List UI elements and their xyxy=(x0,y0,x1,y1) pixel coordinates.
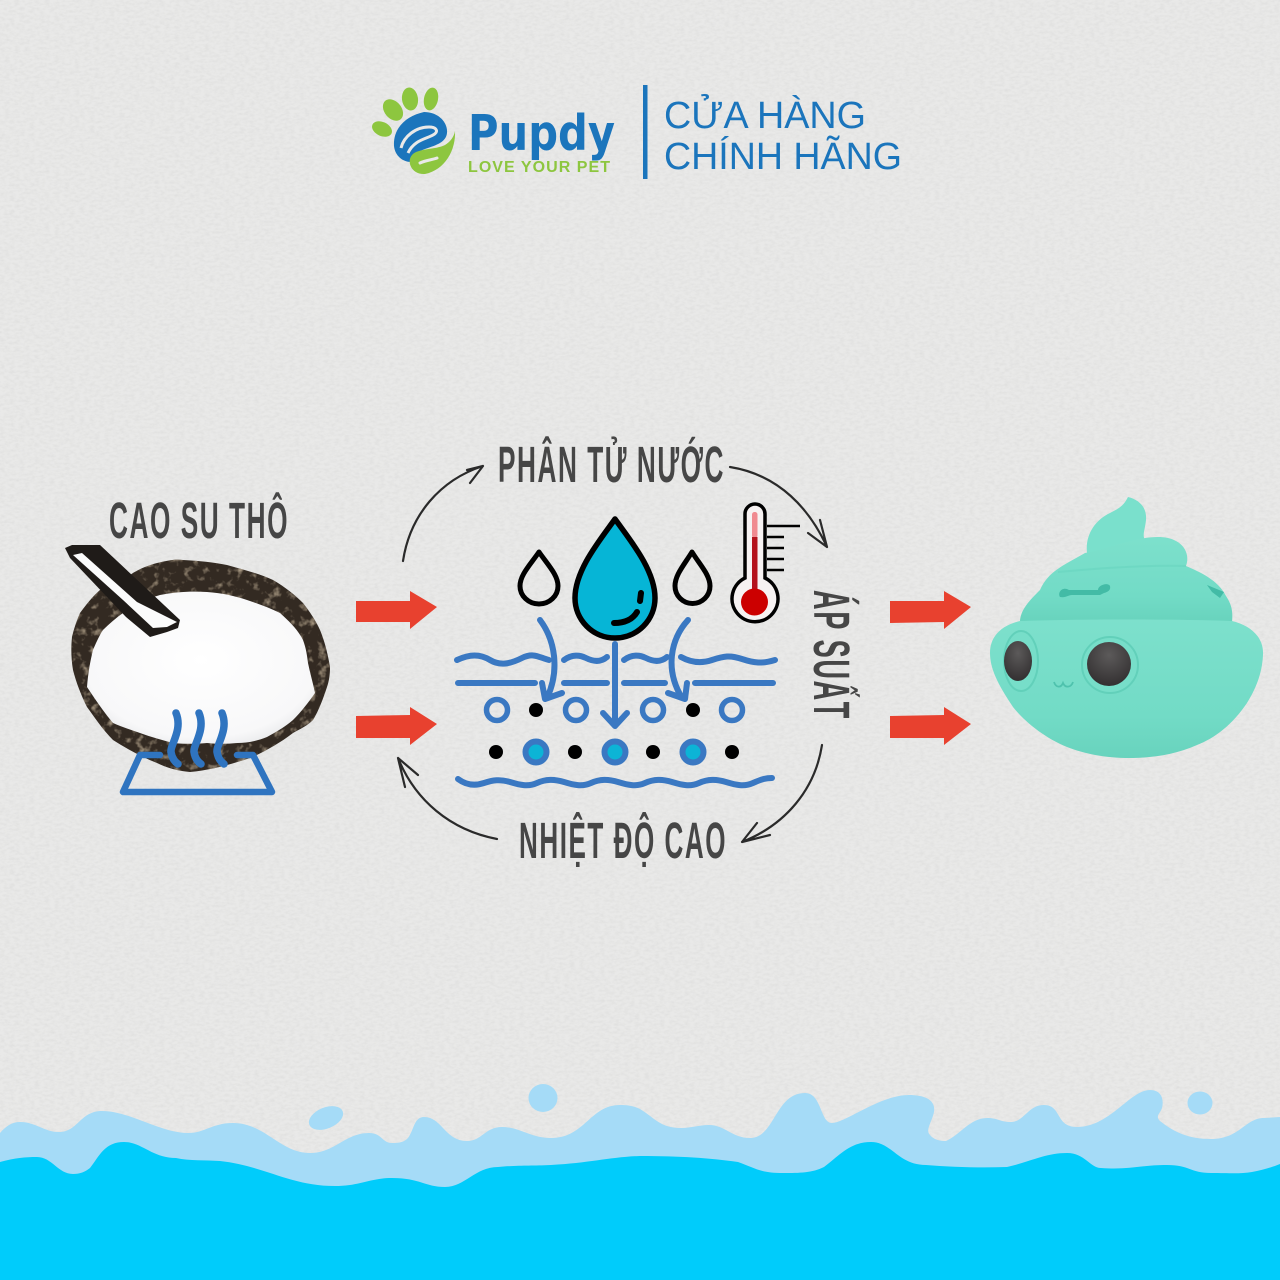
heading: official store: CHÍNH HÃNG xyxy=(664,135,902,178)
divider xyxy=(643,85,648,179)
toy tail xyxy=(1087,497,1146,553)
label: pressure: ÁP SUẤT xyxy=(803,590,861,720)
wooden spout xyxy=(65,545,180,637)
icon: small water drop left xyxy=(520,552,558,604)
steam xyxy=(171,713,224,764)
latex xyxy=(87,592,315,744)
toy lower body xyxy=(990,620,1263,758)
arrow: red output 2 xyxy=(890,707,971,745)
label: high temperature: NHIỆT ĐỘ CAO xyxy=(519,811,727,869)
toy side mark xyxy=(1207,585,1224,598)
water decoration xyxy=(0,1084,1280,1280)
cycle arrows xyxy=(398,466,827,842)
membrane waves xyxy=(457,655,775,785)
icon: large water drop xyxy=(575,519,655,638)
toy upper tier xyxy=(1020,537,1232,622)
icon: thermometer xyxy=(732,504,800,622)
arrows through membrane xyxy=(540,620,688,726)
deep wave xyxy=(0,1142,1280,1280)
heading: official store: CỬA HÀNG xyxy=(664,93,866,137)
toy bone mark xyxy=(1059,584,1110,597)
toy right eye xyxy=(1082,637,1138,693)
toy left eye xyxy=(1004,631,1038,691)
illustration: bowl of latex on burner xyxy=(65,545,330,792)
icon: paw and swirl xyxy=(370,86,455,174)
particles row 2 xyxy=(489,742,739,762)
arrow: red output 1 xyxy=(890,591,971,629)
diagram: water passing through membrane xyxy=(457,504,800,785)
droplets xyxy=(305,1084,1212,1134)
burner xyxy=(123,755,272,792)
product: teal poop-shaped toy xyxy=(990,497,1263,758)
toy smile xyxy=(1054,682,1073,687)
icon: small water drop right xyxy=(675,552,710,604)
label: raw rubber: CAO SU THÔ xyxy=(109,491,289,549)
logo tagline: LOVE YOUR PET xyxy=(468,159,610,176)
coconut shell bowl xyxy=(71,560,330,772)
particles row 1 xyxy=(486,700,742,720)
light wave xyxy=(0,1090,1280,1280)
label: water molecules: PHÂN TỬ NƯỚC xyxy=(498,435,725,493)
arrow: red input 1 xyxy=(356,591,437,629)
logo: Pupdy xyxy=(370,86,615,176)
arrow: red input 2 xyxy=(356,707,437,745)
heading: official store xyxy=(664,93,902,178)
logo wordmark: Pupdy xyxy=(468,105,615,162)
